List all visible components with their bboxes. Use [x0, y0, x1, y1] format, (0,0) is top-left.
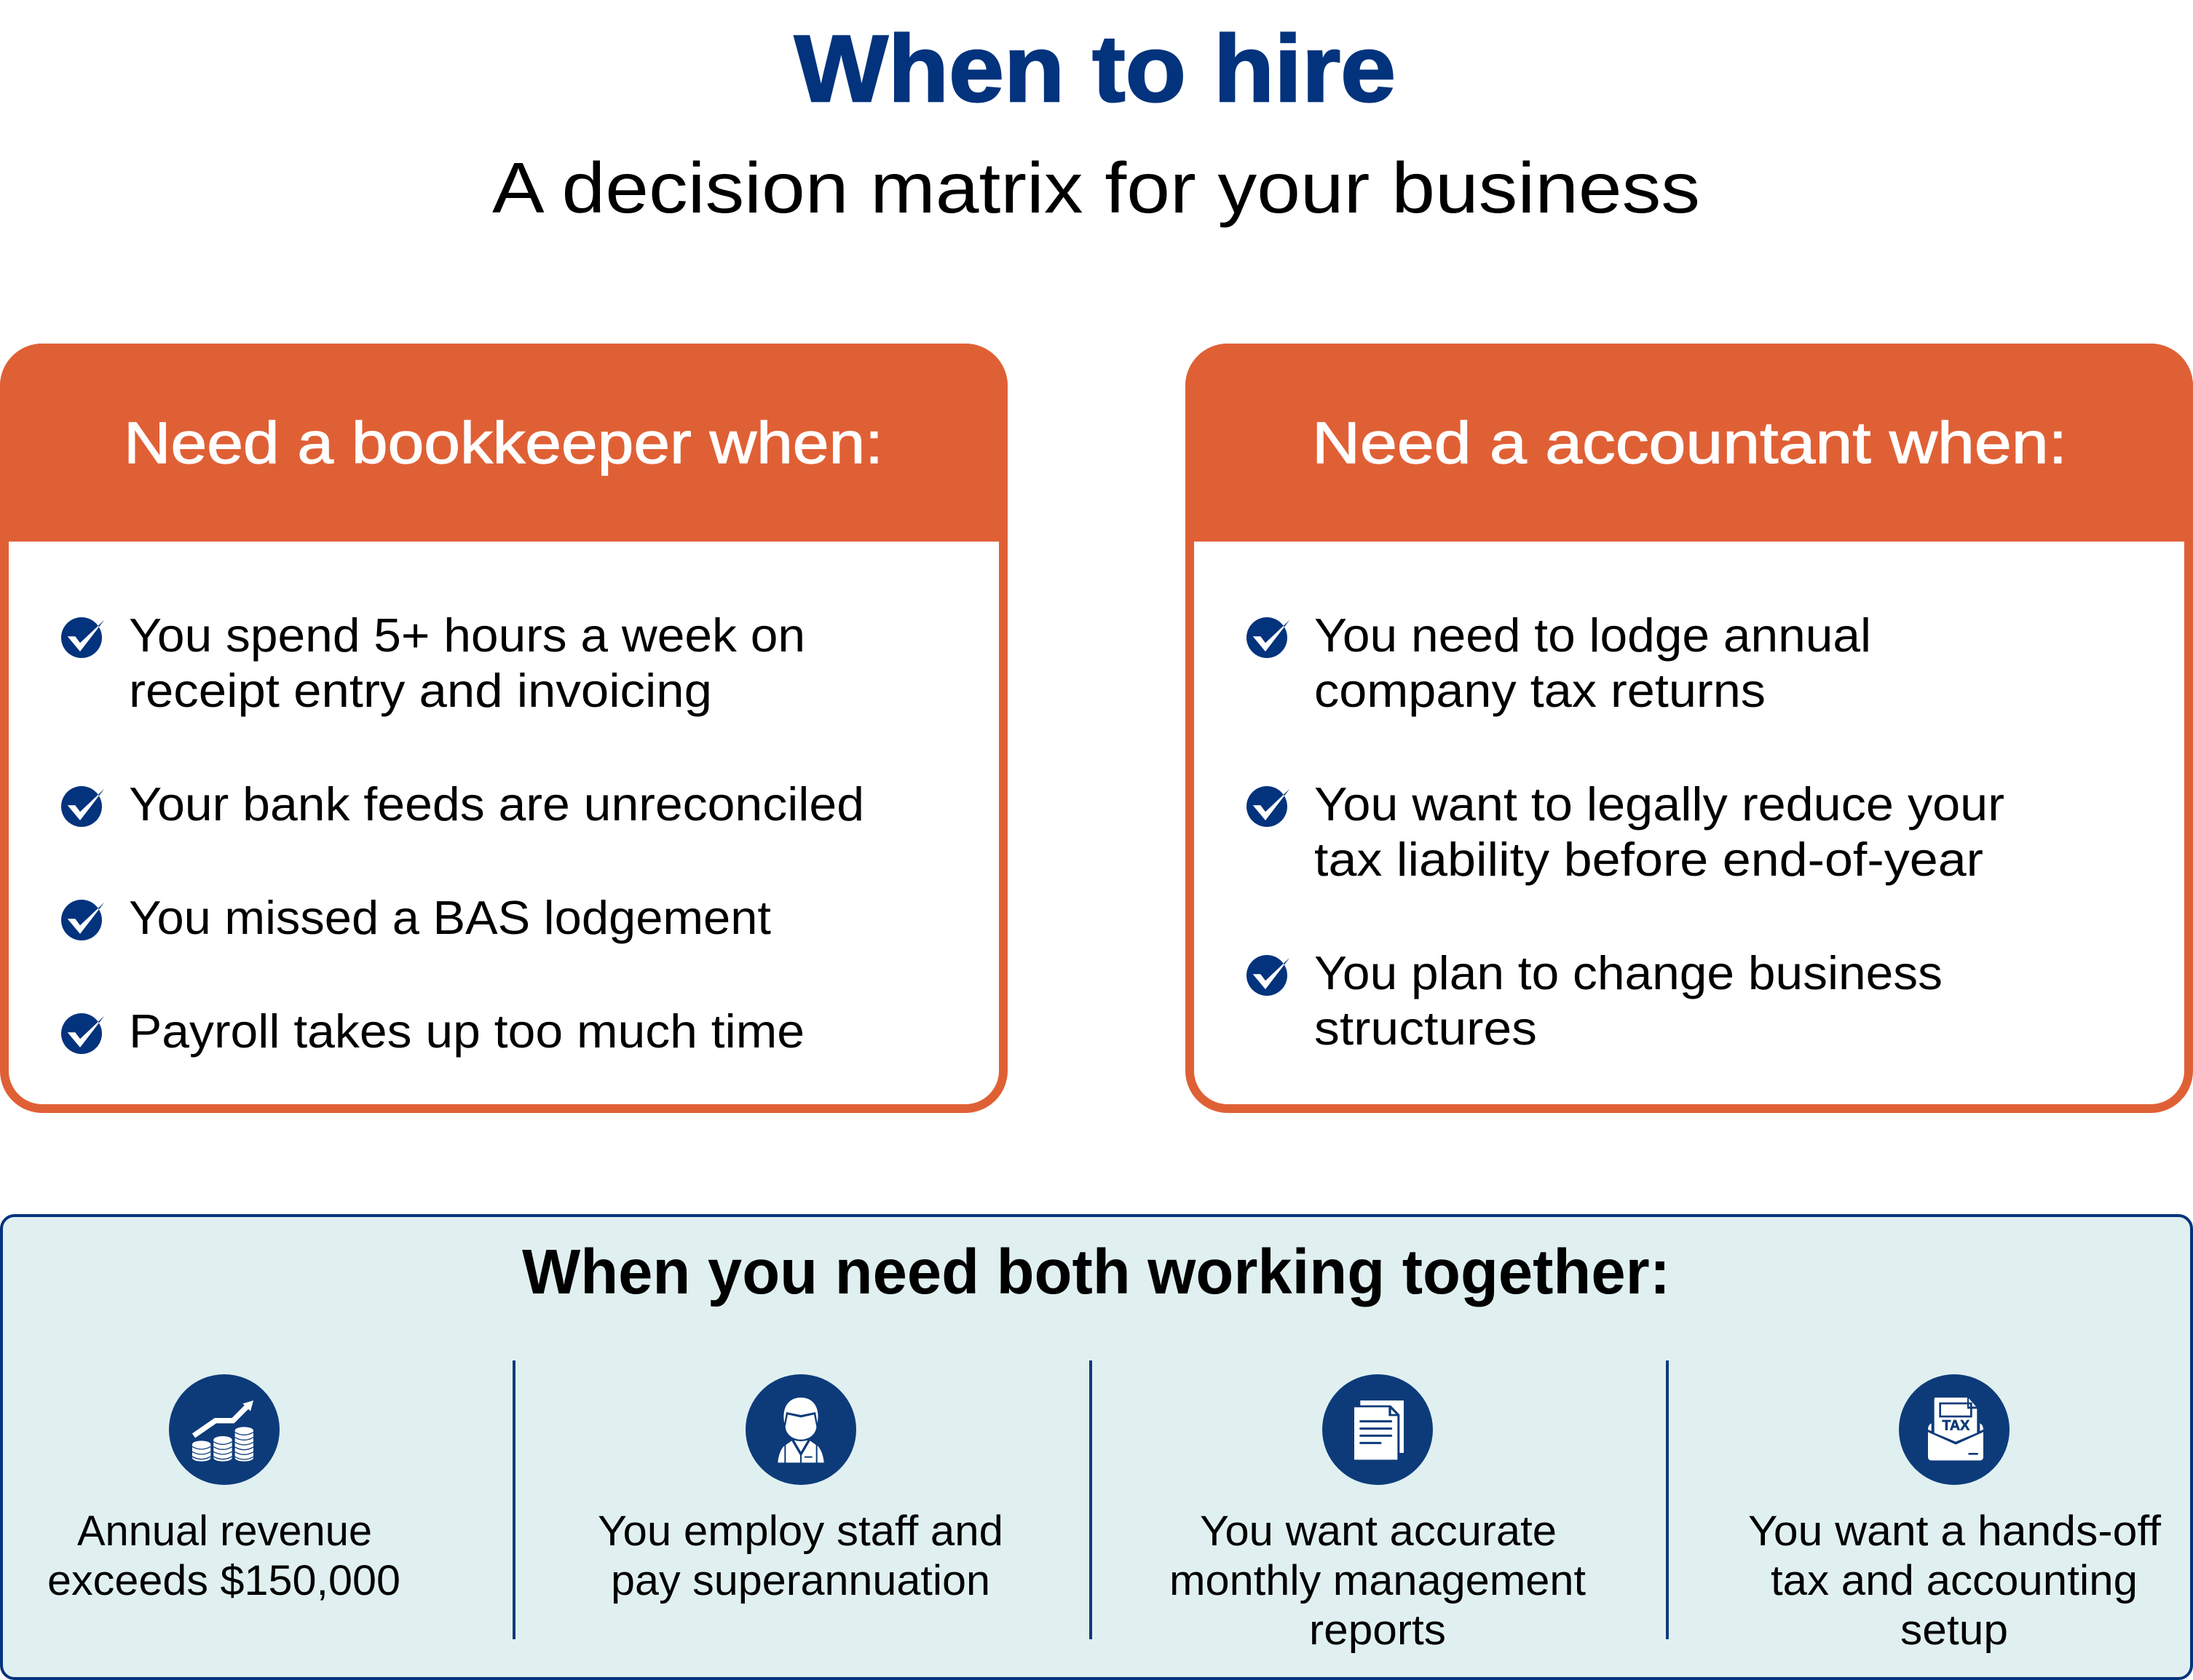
caption: revenue: exceeds $150,000: [47, 1557, 400, 1604]
heading: accountant: Need a accountant when:: [1312, 411, 2067, 476]
panel: need an accountant: [1185, 344, 2193, 1109]
item: business structures: You plan to change business: [1314, 946, 1943, 999]
item: payroll: Payroll takes up too much time: [129, 1005, 805, 1058]
caption: staff: [598, 1507, 1003, 1604]
item: reduce liability: [1246, 777, 2004, 886]
icon: revenue coins: [169, 1374, 280, 1485]
caption: hands-off: tax and accounting: [1771, 1557, 2138, 1604]
item: tax returns: [1246, 609, 1871, 717]
caption: staff: pay superannuation: [611, 1557, 990, 1604]
caption: revenue: Annual revenue: [77, 1507, 372, 1555]
item: hours: [61, 609, 805, 717]
icon: tax envelope: TAX: [1942, 1419, 1969, 1434]
caption: revenue: [47, 1507, 400, 1604]
item: hours: You spend 5+ hours a week on: [129, 609, 805, 662]
title: When to hire: [794, 15, 1396, 122]
item: hours: receipt entry and invoicing: [129, 664, 712, 717]
item: BAS: You missed a BAS lodgement: [129, 891, 771, 944]
icon: employee: [746, 1374, 856, 1485]
item: reduce liability: You want to legally reduce your: [1314, 777, 2004, 831]
item: business structures: structures: [1314, 1002, 1537, 1055]
subtitle: A decision matrix for your business: [492, 148, 1700, 228]
caption: hands-off: You want a hands-off: [1748, 1507, 2162, 1555]
checklist: accountant: [1246, 609, 2004, 1055]
item: bank feeds: Your bank feeds are unreconciled: [129, 777, 864, 831]
item: tax returns: company tax returns: [1314, 664, 1766, 717]
caption: reports: monthly management: [1169, 1557, 1586, 1604]
caption: reports: [1169, 1507, 1586, 1654]
icon: reports: [1322, 1374, 1433, 1485]
item: tax returns: You need to lodge annual: [1314, 609, 1871, 662]
caption: reports: You want accurate: [1200, 1507, 1557, 1555]
checklist: bookkeeper: [61, 609, 864, 1058]
item: business structures: [1246, 946, 1943, 1055]
caption: staff: You employ staff and: [598, 1507, 1003, 1555]
heading: bookkeeper: Need a bookkeeper when:: [124, 411, 883, 476]
icon: tax envelope: [1899, 1374, 2010, 1485]
caption: hands-off: [1748, 1507, 2162, 1654]
panel: both working together: [1, 1216, 2192, 1679]
caption: reports: reports: [1309, 1606, 1446, 1654]
heading: both: When you need both working together:: [522, 1237, 1670, 1307]
caption: hands-off: setup: [1900, 1606, 2008, 1654]
item: reduce liability: tax liability before end-of-year: [1314, 833, 1983, 886]
panel: need a bookkeeper: [0, 344, 1008, 1109]
